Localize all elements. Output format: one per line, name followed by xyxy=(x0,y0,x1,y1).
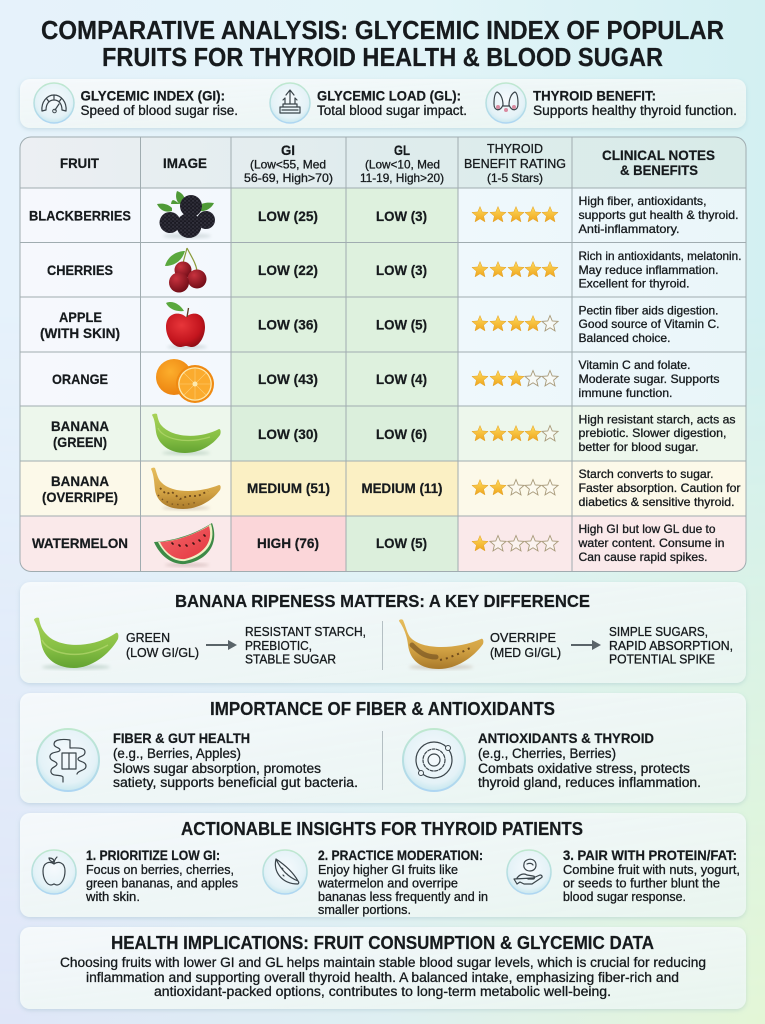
text: green effects: STABLE SUGAR xyxy=(245,652,336,666)
clinical notes xyxy=(577,194,742,564)
clinical notes: Vitamin C and folate. xyxy=(578,358,690,372)
panel: fiber and antioxidants xyxy=(20,693,746,803)
text: prioritize low GI: Focus on berries, cherries, xyxy=(86,862,234,877)
text: practice moderation: bananas less frequently and in xyxy=(318,889,488,904)
panel: banana ripeness xyxy=(20,582,746,683)
fruit names: APPLE xyxy=(59,309,102,325)
clinical notes: Can cause rapid spikes. xyxy=(578,550,708,564)
label: green: GREEN xyxy=(126,631,170,645)
text: antioxidants and thyroid: thyroid gland, reduces inflammation. xyxy=(478,775,701,790)
table header row: (Low<10, Med xyxy=(365,158,440,172)
title xyxy=(41,17,724,72)
table header row xyxy=(60,141,715,185)
icon: large overripe banana xyxy=(399,619,483,670)
text: fiber and gut health: FIBER & GUT HEALTH xyxy=(113,730,250,746)
icon: antioxidant cell xyxy=(403,729,465,791)
label: green: (LOW GI/GL) xyxy=(126,646,199,660)
heading: fiber and antioxidants: IMPORTANCE OF FIBER & ANTIOXIDANTS xyxy=(210,699,555,719)
text: health implications body: antioxidant-packed options, contributes to long-term metabolic well-being. xyxy=(154,984,611,999)
GI values: MEDIUM (51) xyxy=(247,480,330,496)
icon: thyroid gland xyxy=(486,83,526,123)
legend: glycemic load: GLYCEMIC LOAD (GL): xyxy=(317,88,461,104)
panel: comparison table xyxy=(20,137,746,572)
fruit names xyxy=(29,208,131,551)
GL values xyxy=(362,208,442,551)
text: pair with protein and fat: blood sugar response. xyxy=(563,889,686,904)
GI values xyxy=(247,208,330,551)
text: fiber and gut health: satiety, supports beneficial gut bacteria. xyxy=(113,775,358,790)
GL values: LOW (5) xyxy=(376,316,427,332)
text: antioxidants and thyroid: (e.g., Cherries, Berries) xyxy=(478,746,616,761)
GI values: LOW (25) xyxy=(258,208,318,224)
clinical notes: immune function. xyxy=(578,386,672,400)
text: antioxidants and thyroid: Combats oxidative stress, protects xyxy=(478,761,690,776)
table header row: GI xyxy=(281,143,295,158)
table header row: THYROID xyxy=(487,141,543,156)
legend: thyroid benefit: Supports healthy thyroid function. xyxy=(533,103,737,118)
clinical notes: diabetics & sensitive thyroid. xyxy=(578,495,734,509)
icon: watermelon outline xyxy=(263,850,307,894)
label: overripe xyxy=(490,631,561,660)
clinical notes: May reduce inflammation. xyxy=(578,263,718,277)
legend: glycemic index: Speed of blood sugar rise. xyxy=(80,103,238,118)
text: prioritize low GI: 1. PRIORITIZE LOW GI: xyxy=(86,848,220,863)
text: overripe effects: RAPID ABSORPTION, xyxy=(609,639,733,653)
GI values: HIGH (76) xyxy=(257,535,319,551)
text: practice moderation: Enjoy higher GI fruits like xyxy=(318,862,458,877)
table header row: & BENEFITS xyxy=(620,162,698,178)
GL values: LOW (5) xyxy=(376,535,427,551)
image: blackberries xyxy=(157,191,215,238)
image: watermelon xyxy=(154,523,214,567)
text: health implications body: Choosing fruits with lower GI and GL helps maintain stable blood sugar levels, which is crucial for reducing xyxy=(60,955,706,970)
text: health implications body xyxy=(60,955,706,999)
GL values: LOW (3) xyxy=(376,208,427,224)
text: prioritize low GI: green bananas, and apples xyxy=(86,876,238,890)
table header row: GL xyxy=(394,143,410,158)
clinical notes: High resistant starch, acts as xyxy=(578,412,736,426)
text: practice moderation: 2. PRACTICE MODERATION: xyxy=(318,848,483,863)
image: green banana xyxy=(152,414,221,455)
clinical notes: Excellent for thyroid. xyxy=(578,276,690,290)
fruit names: CHERRIES xyxy=(47,262,113,278)
fruit names: WATERMELON xyxy=(32,535,128,551)
text: practice moderation: watermelon and overripe xyxy=(317,876,458,890)
text: health implications body: inflammation and supporting overall thyroid health. A balanced intake, emphasizing fiber-rich and xyxy=(86,970,679,985)
text: pair with protein and fat: or seeds to further blunt the xyxy=(563,876,720,890)
text: practice moderation xyxy=(317,848,488,917)
GL values: LOW (3) xyxy=(376,262,427,278)
clinical notes: prebiotic. Slower digestion, xyxy=(578,426,726,440)
GI values: LOW (36) xyxy=(258,316,318,332)
title: FRUITS FOR THYROID HEALTH & BLOOD SUGAR xyxy=(102,44,663,72)
text: antioxidants and thyroid: ANTIOXIDANTS & THYROID xyxy=(478,730,654,746)
clinical notes: High fiber, antioxidants, xyxy=(578,194,706,208)
panel: health implications xyxy=(20,927,746,1009)
clinical notes: Good source of Vitamin C. xyxy=(578,317,720,331)
image: apple xyxy=(166,302,207,349)
fruit names: (OVERRIPE) xyxy=(42,489,118,505)
icon: hand with nuts xyxy=(507,850,551,894)
image: overripe banana xyxy=(151,468,221,510)
text: fiber and gut health: Slows sugar absorption, promotes xyxy=(113,761,321,776)
clinical notes: Moderate sugar. Supports xyxy=(578,372,720,386)
GI values: LOW (22) xyxy=(258,262,318,278)
GI values: LOW (30) xyxy=(258,426,318,442)
star ratings xyxy=(472,206,558,551)
text: overripe effects: SIMPLE SUGARS, xyxy=(609,625,708,639)
icon: gut xyxy=(37,729,99,791)
GL values: MEDIUM (11) xyxy=(362,480,442,496)
legend: thyroid benefit xyxy=(533,88,737,118)
title: COMPARATIVE ANALYSIS: GLYCEMIC INDEX OF POPULAR xyxy=(41,17,724,45)
clinical notes: Rich in antioxidants, melatonin. xyxy=(578,249,742,263)
fruit names: (WITH SKIN) xyxy=(40,325,120,341)
label: green xyxy=(126,631,199,660)
image: cherries xyxy=(165,248,206,292)
panel: actionable insights xyxy=(20,813,746,917)
clinical notes: supports gut health & thyroid. xyxy=(578,208,738,222)
clinical notes: Pectin fiber aids digestion. xyxy=(578,304,718,318)
legend: glycemic index xyxy=(80,88,238,118)
clinical notes: Starch converts to sugar. xyxy=(578,467,714,481)
clinical notes: water content. Consume in xyxy=(577,536,724,550)
clinical notes: Anti-inflammatory. xyxy=(578,222,680,236)
fruit names: ORANGE xyxy=(52,371,108,387)
icon: large green banana xyxy=(34,618,118,670)
fruit names: BLACKBERRIES xyxy=(29,208,131,224)
label: overripe: (MED GI/GL) xyxy=(490,646,561,660)
GI values: LOW (43) xyxy=(258,371,318,387)
legend: thyroid benefit: THYROID BENEFIT: xyxy=(533,88,656,104)
text: practice moderation: smaller portions. xyxy=(318,902,411,917)
icon: glycemic index gauge xyxy=(34,83,74,123)
label: overripe: OVERRIPE xyxy=(490,631,556,645)
panel: legend xyxy=(20,79,746,128)
table header row: CLINICAL NOTES xyxy=(602,147,715,163)
text: pair with protein and fat: 3. PAIR WITH PROTEIN/FAT: xyxy=(563,848,737,863)
table cell backgrounds xyxy=(20,137,746,572)
icon: apple outline xyxy=(32,850,76,894)
table header row: BENEFIT RATING xyxy=(464,156,566,171)
text: overripe effects: POTENTIAL SPIKE xyxy=(609,652,715,666)
text: antioxidants and thyroid xyxy=(478,730,701,790)
table header row: IMAGE xyxy=(163,156,207,171)
GL values: LOW (6) xyxy=(376,426,427,442)
text: pair with protein and fat: Combine fruit with nuts, yogurt, xyxy=(563,862,740,877)
clinical notes: better for blood sugar. xyxy=(578,440,698,454)
text: overripe effects xyxy=(609,625,733,666)
heading: actionable insights: ACTIONABLE INSIGHTS FOR THYROID PATIENTS xyxy=(181,819,583,839)
table header row: (Low<55, Med xyxy=(250,158,326,172)
legend: glycemic load xyxy=(317,88,467,118)
icon: glycemic load xyxy=(270,83,310,123)
table header row: 56-69, High>70) xyxy=(244,171,333,185)
arrow: overripe to effects xyxy=(571,640,601,650)
table header row: 11-19, High>20) xyxy=(360,171,444,185)
text: green effects xyxy=(245,625,366,666)
heading: banana ripeness: BANANA RIPENESS MATTERS: A KEY DIFFERENCE xyxy=(175,591,590,611)
fruit names: (GREEN) xyxy=(53,434,107,450)
fruit names: BANANA xyxy=(51,473,109,489)
legend: glycemic index: GLYCEMIC INDEX (GI): xyxy=(80,88,225,104)
text: green effects: PREBIOTIC, xyxy=(245,639,312,653)
text: prioritize low GI: with skin. xyxy=(85,889,140,904)
text: prioritize low GI xyxy=(85,848,238,904)
clinical notes: High GI but low GL due to xyxy=(578,522,716,536)
GL values: LOW (4) xyxy=(376,371,427,387)
heading: health implications: HEALTH IMPLICATIONS: FRUIT CONSUMPTION & GLYCEMIC DATA xyxy=(111,932,654,953)
arrow: green to effects xyxy=(206,640,237,650)
text: fiber and gut health: (e.g., Berries, Apples) xyxy=(113,746,241,761)
clinical notes: Faster absorption. Caution for xyxy=(578,481,741,495)
table header row: FRUIT xyxy=(60,156,100,171)
text: pair with protein and fat xyxy=(563,848,740,904)
fruit names: BANANA xyxy=(51,418,109,434)
text: fiber and gut health xyxy=(113,730,358,790)
legend: glycemic load: Total blood sugar impact. xyxy=(317,103,467,118)
table header row: (1-5 Stars) xyxy=(487,171,543,185)
text: green effects: RESISTANT STARCH, xyxy=(245,625,366,639)
image: orange xyxy=(156,359,214,403)
clinical notes: Balanced choice. xyxy=(578,331,670,345)
